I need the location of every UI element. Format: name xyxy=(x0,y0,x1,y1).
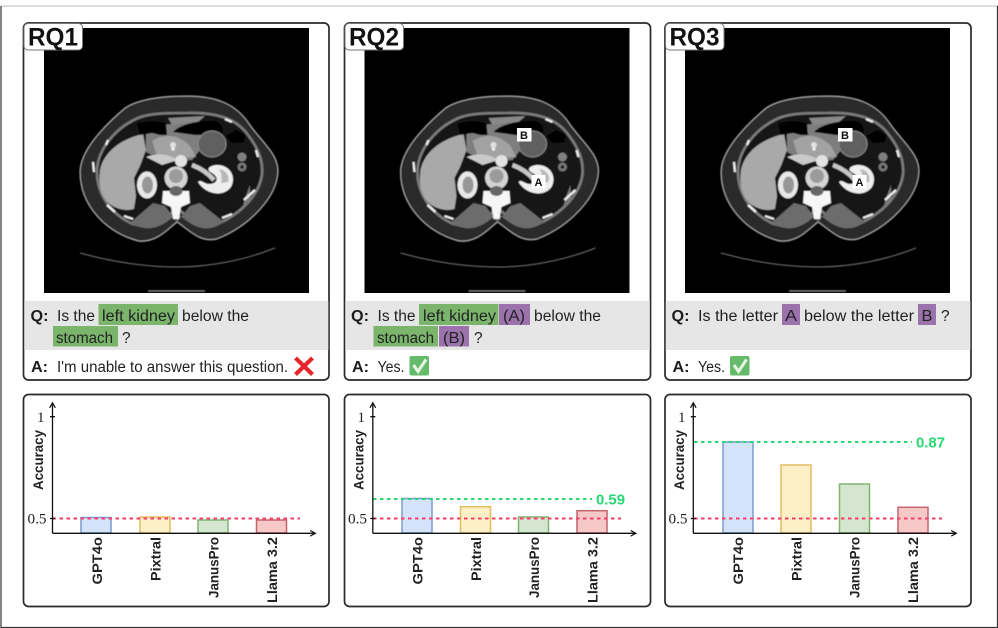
best score value RQ2: 0.59 xyxy=(596,492,625,508)
marker A RQ2: A xyxy=(534,177,542,189)
question RQ3: ? xyxy=(941,308,950,325)
axis labels RQ1: Llama 3.2 xyxy=(264,537,280,603)
axes RQ2 xyxy=(370,403,636,533)
question RQ1: Q: xyxy=(30,308,48,325)
bar Llama 3.2 RQ2 xyxy=(577,511,607,533)
question RQ2: ? xyxy=(474,330,483,347)
question band RQ2 xyxy=(345,301,650,350)
bar Llama 3.2 RQ3 xyxy=(898,507,928,533)
baseline 0.5 RQ1 xyxy=(52,518,300,520)
axes RQ1 xyxy=(50,403,315,533)
question RQ3: Q: xyxy=(672,308,690,325)
bar chart: RQ1 accuracy xyxy=(24,394,329,606)
bar JanusPro RQ2 xyxy=(518,517,548,533)
question RQ2: below the xyxy=(534,308,601,325)
bar JanusPro RQ1 xyxy=(198,520,228,533)
axis labels RQ2: Llama 3.2 xyxy=(584,537,600,603)
marker B RQ3: B xyxy=(841,130,849,142)
question RQ3: Is the letter xyxy=(698,308,778,325)
axis labels RQ1: 1 xyxy=(37,410,44,426)
axis labels RQ1: GPT4o xyxy=(89,537,105,584)
best score line RQ3 xyxy=(694,441,912,443)
panel: RQ1 scan and question xyxy=(24,23,329,380)
axis labels RQ1: JanusPro xyxy=(206,537,222,598)
answer RQ1: I'm unable to answer this question. xyxy=(57,359,288,376)
best score line RQ2 xyxy=(373,498,592,500)
axis labels RQ3: GPT4o xyxy=(730,537,746,584)
answer RQ2: Yes. xyxy=(378,359,404,376)
axis labels RQ3: Accuracy xyxy=(671,430,687,490)
marker A RQ3 xyxy=(852,175,866,189)
bar Pixtral RQ1 xyxy=(140,517,170,533)
bar chart: RQ3 accuracy xyxy=(665,394,971,606)
question RQ2: left kidney xyxy=(423,308,496,325)
baseline 0.5 RQ3 xyxy=(694,518,942,520)
question band RQ1 xyxy=(24,301,328,350)
bar JanusPro RQ3 xyxy=(840,484,870,533)
axis labels RQ2: Accuracy xyxy=(350,430,366,490)
bar Llama 3.2 RQ1 xyxy=(256,520,286,533)
axis labels RQ2: 1 xyxy=(358,410,365,426)
answer RQ2: A: xyxy=(352,359,369,376)
bar GPT4o RQ1 xyxy=(81,518,111,533)
marker B RQ3 xyxy=(838,128,852,142)
axis labels RQ1 xyxy=(28,410,280,603)
label RQ3: RQ3 xyxy=(670,24,720,52)
question RQ1: Is the xyxy=(57,308,95,325)
question RQ2: (B) xyxy=(443,330,465,347)
bar Pixtral RQ3 xyxy=(781,465,811,533)
marker A RQ2 xyxy=(532,175,546,189)
question RQ3 xyxy=(672,304,950,325)
panel: RQ2 scan and question xyxy=(344,23,650,380)
axis labels RQ1: 0.5 xyxy=(28,512,46,528)
axis labels RQ3: Pixtral xyxy=(788,537,804,581)
question RQ3: B xyxy=(922,308,932,325)
axis labels RQ1: Accuracy xyxy=(30,430,46,490)
axis labels RQ2 xyxy=(348,410,600,603)
axis labels RQ3 xyxy=(668,410,921,603)
answer RQ2 xyxy=(352,356,429,376)
CT scan RQ3 xyxy=(685,28,950,293)
CT scan RQ2 xyxy=(364,28,630,293)
axis labels RQ3: 1 xyxy=(678,410,686,426)
question RQ1: below the xyxy=(182,308,249,325)
question RQ1: left kidney xyxy=(102,308,175,325)
question RQ2: (A) xyxy=(503,308,525,325)
bar Pixtral RQ2 xyxy=(460,507,490,533)
bar GPT4o RQ2 xyxy=(402,498,432,533)
question RQ3: below the letter xyxy=(804,308,914,325)
label RQ2: RQ2 xyxy=(349,24,399,52)
axis labels RQ2: 0.5 xyxy=(348,512,367,528)
panel: RQ3 scan and question xyxy=(665,23,971,380)
question RQ2: Is the xyxy=(378,308,416,325)
axis labels RQ2: Pixtral xyxy=(468,537,484,581)
best score value RQ3: 0.87 xyxy=(916,434,945,452)
axis labels RQ3: 0.5 xyxy=(668,512,688,528)
answer RQ3: A: xyxy=(672,359,690,376)
label RQ1: RQ1 xyxy=(28,24,78,52)
answer RQ3 xyxy=(672,356,750,376)
axis labels RQ1: Pixtral xyxy=(148,537,164,581)
axes RQ3 xyxy=(691,403,956,533)
question RQ1: stomach xyxy=(56,330,113,347)
axis labels RQ3: JanusPro xyxy=(846,537,862,598)
question RQ2: stomach xyxy=(377,330,434,347)
axis labels RQ3: Llama 3.2 xyxy=(905,537,921,603)
question RQ1: ? xyxy=(122,330,131,347)
marker B RQ2 xyxy=(517,128,532,142)
marker B RQ2: B xyxy=(520,130,528,142)
bar GPT4o RQ3 xyxy=(723,442,753,533)
question band RQ3 xyxy=(666,301,970,350)
question RQ1 xyxy=(30,304,249,347)
question RQ2: Q: xyxy=(351,308,369,325)
CT scan RQ1 xyxy=(44,28,309,293)
axis labels RQ2: GPT4o xyxy=(410,537,426,584)
question RQ3: A xyxy=(785,308,798,325)
axis labels RQ2: JanusPro xyxy=(526,537,542,598)
answer RQ1: A: xyxy=(31,359,48,376)
bar chart: RQ2 accuracy xyxy=(344,394,650,606)
marker A RQ3: A xyxy=(856,177,864,189)
baseline 0.5 RQ2 xyxy=(373,518,621,520)
question RQ2 xyxy=(351,304,601,347)
answer RQ3: Yes. xyxy=(698,359,725,376)
